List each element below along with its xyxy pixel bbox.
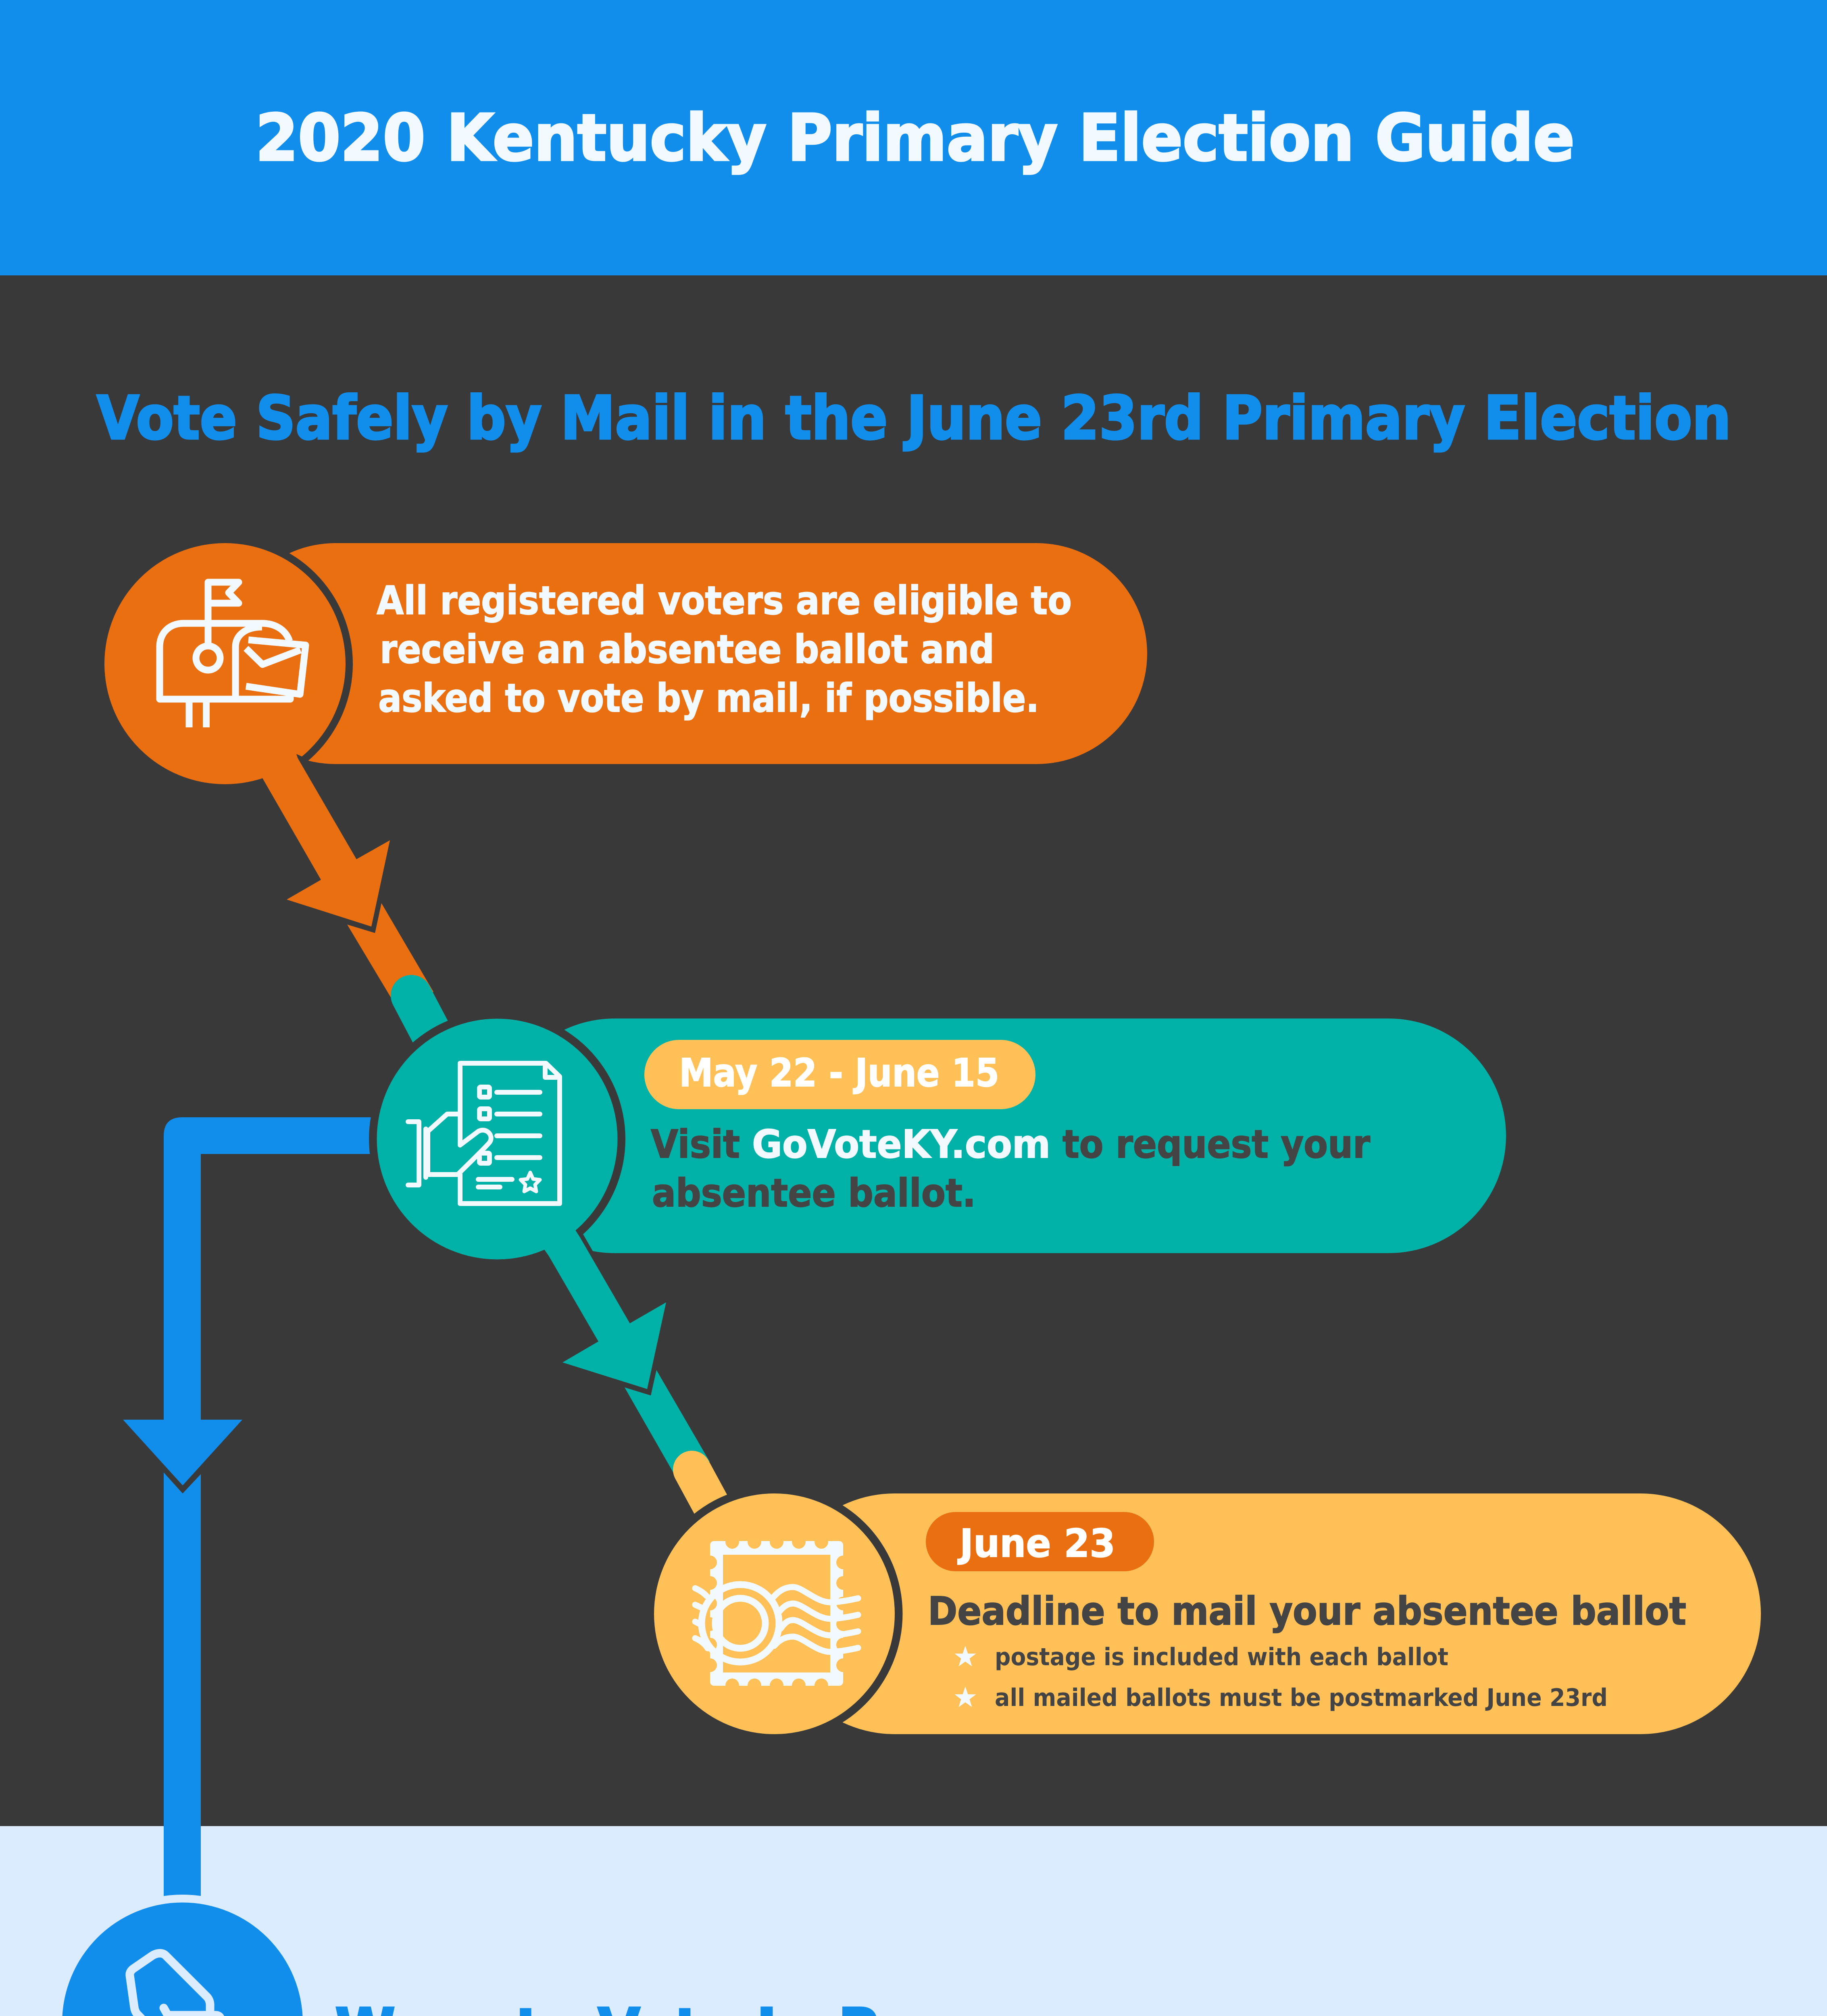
- text: step 1: [377, 578, 1072, 721]
- arrow: yellow tail from teal: [692, 1470, 726, 1532]
- panel: step 1 eligibility: [97, 536, 1147, 791]
- bullet list: postage notes: [954, 1643, 1608, 1712]
- icon: hand and checklist: [408, 1063, 560, 1204]
- date pill: June 23: [926, 1512, 1154, 1571]
- text: step 2: absentee ballot.: [652, 1170, 976, 1216]
- arrow: teal tail segment: [625, 1370, 710, 1480]
- text: step 1: receive an absentee ballot and: [380, 627, 994, 672]
- panel: step 3 mail deadline: [646, 1485, 1761, 1742]
- text: step 2: [651, 1122, 1371, 1216]
- date pill: May 22 - June 15: May 22 - June 15: [679, 1050, 999, 1095]
- arrow: blue path to in-person: [123, 1117, 403, 1485]
- bullet list: postage notes: all mailed ballots must be postmarked June 23rd: [995, 1684, 1608, 1712]
- heading: vote safely by mail: Vote Safely by Mail in the June 23rd Primary Election: [97, 383, 1731, 453]
- bullet list: postage notes: postage is included with each ballot: [995, 1643, 1448, 1671]
- arrow: orange tail segment: [347, 903, 433, 1008]
- text: step 2: GoVoteKY.com: [752, 1122, 1050, 1167]
- text: step 1: All registered voters are eligible to: [377, 578, 1072, 623]
- icon: mailbox: [160, 582, 306, 727]
- text: step 1: asked to vote by mail, if possible.: [378, 675, 1039, 721]
- arrow: teal tail from orange: [411, 996, 448, 1064]
- text: step 2: Visit: [651, 1122, 740, 1167]
- panel: dark mail section: [0, 275, 1827, 1826]
- arrow: teal head segment: [540, 1226, 666, 1389]
- icon: hand casting ballot: [118, 1953, 251, 2016]
- text: step 2: to request your: [1062, 1122, 1371, 1167]
- arrow: blue shaft lower: [164, 1472, 201, 1903]
- panel: ways to vote in-person: [54, 1895, 1565, 2016]
- icon: postage stamp: [695, 1535, 858, 1692]
- title: 2020 Kentucky Primary Election Guide: [256, 101, 1575, 175]
- header band: [0, 0, 1827, 275]
- date pill: May 22 - June 15: [644, 1040, 1035, 1109]
- panel: step 2 request ballot: [369, 1011, 1506, 1267]
- date pill: June 23: June 23: [957, 1521, 1115, 1566]
- arrow: orange head segment: [254, 745, 390, 927]
- text: deadline heading: Deadline to mail your absentee ballot: [928, 1589, 1686, 1634]
